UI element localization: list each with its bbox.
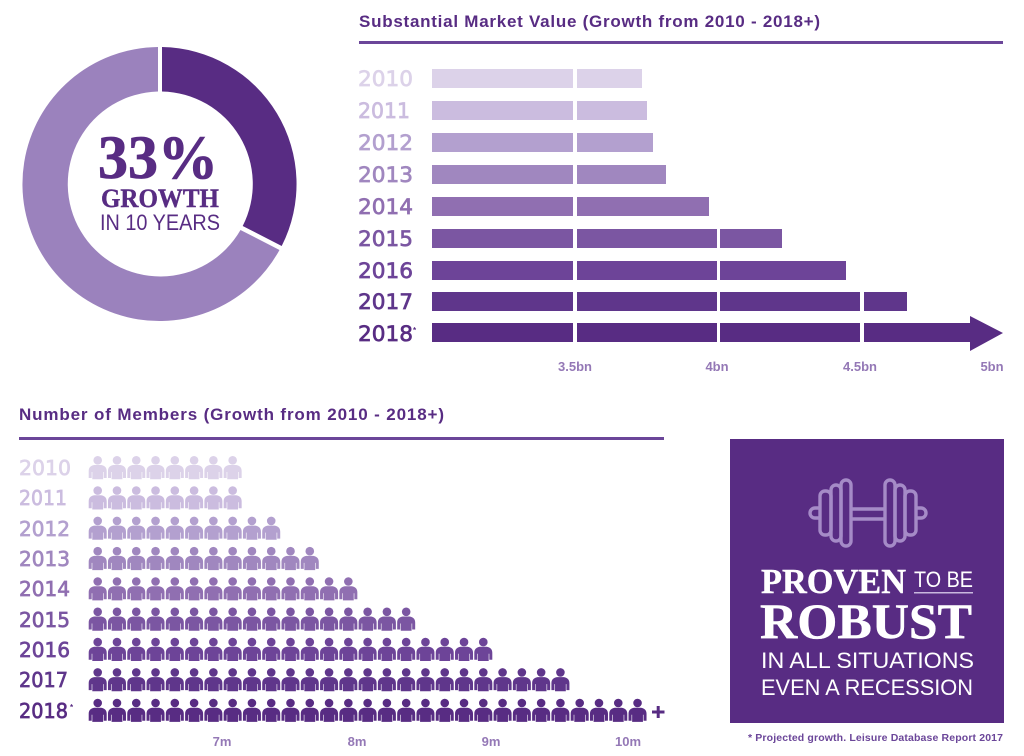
year labels: 2013 (358, 163, 413, 188)
pictogram chart: members (19, 456, 664, 749)
people row 2011 (89, 486, 242, 510)
year labels: 2018 (358, 322, 413, 347)
bar 2011 (432, 101, 647, 120)
axis labels: 7m (213, 734, 231, 749)
people row 2012 (89, 517, 280, 540)
people row 2014 (89, 577, 357, 600)
icon: dumbbell (810, 480, 926, 546)
bar 2013 (432, 165, 666, 184)
panel text: PROVEN (761, 562, 906, 601)
people row 2017 (89, 668, 569, 691)
year labels: 2013 (19, 547, 70, 571)
asterisk: * (413, 326, 417, 335)
bar 2015 (432, 229, 782, 248)
year labels: 2015 (358, 227, 413, 252)
year labels: 2014 (19, 577, 70, 601)
year labels: 2017 (19, 668, 68, 692)
footnote: * Projected growth. Leisure Database Report 2017 (748, 732, 1003, 744)
donut centre text (98, 125, 220, 235)
year labels (358, 67, 413, 347)
year labels: 2010 (358, 67, 413, 92)
bar 2010 (432, 69, 642, 88)
axis labels: 8m (348, 734, 366, 749)
year labels: 2012 (19, 517, 70, 541)
axis labels: 3.5bn (558, 359, 592, 374)
people row 2016 (89, 638, 492, 661)
people row 2015 (89, 608, 415, 631)
donut chart: 33% growth (22, 47, 297, 321)
year labels: 2015 (19, 608, 70, 632)
heading: members: Number of Members (Growth from 2010 - 2018+) (19, 405, 444, 424)
year labels: 2010 (19, 456, 71, 480)
axis labels: 9m (482, 734, 500, 749)
donut centre text: IN 10 YEARS (100, 210, 220, 235)
panel: proven to be robust (730, 439, 1004, 723)
bar 2016 (432, 261, 846, 280)
year labels: 2018 (19, 699, 68, 723)
bar 2014 (432, 197, 709, 216)
year labels: 2016 (19, 638, 70, 662)
year labels: 2011 (358, 99, 410, 124)
donut centre text: 33% (98, 125, 218, 192)
panel text: ROBUST (760, 593, 972, 649)
plus sign (652, 706, 664, 718)
year labels: 2017 (358, 290, 413, 315)
panel text: TO BE (914, 567, 973, 592)
axis labels (558, 359, 1004, 374)
people row 2018 (89, 699, 647, 722)
year labels: 2014 (358, 195, 413, 220)
bar 2012 (432, 133, 653, 152)
donut centre text: GROWTH (101, 184, 219, 213)
panel text: IN ALL SITUATIONS (761, 648, 974, 673)
axis labels: 4bn (705, 359, 729, 374)
year labels: 2012 (358, 131, 413, 156)
heading: market value: Substantial Market Value (Growth from 2010 - 2018+) (359, 12, 820, 31)
bar 2018 with arrow (432, 316, 1003, 351)
panel text (760, 562, 974, 700)
axis labels (213, 734, 641, 749)
people row 2013 (89, 547, 319, 570)
year labels (19, 456, 71, 723)
people row 2010 (89, 456, 242, 479)
bar 2017 (432, 292, 907, 311)
axis labels: 4.5bn (843, 359, 877, 374)
year labels: 2011 (19, 486, 67, 510)
axis labels: 10m (615, 734, 641, 749)
year labels: 2016 (358, 259, 413, 284)
panel text: EVEN A RECESSION (761, 675, 973, 700)
axis labels: 5bn (980, 359, 1004, 374)
bar chart: market value (358, 67, 1004, 374)
asterisk: * (70, 703, 74, 712)
